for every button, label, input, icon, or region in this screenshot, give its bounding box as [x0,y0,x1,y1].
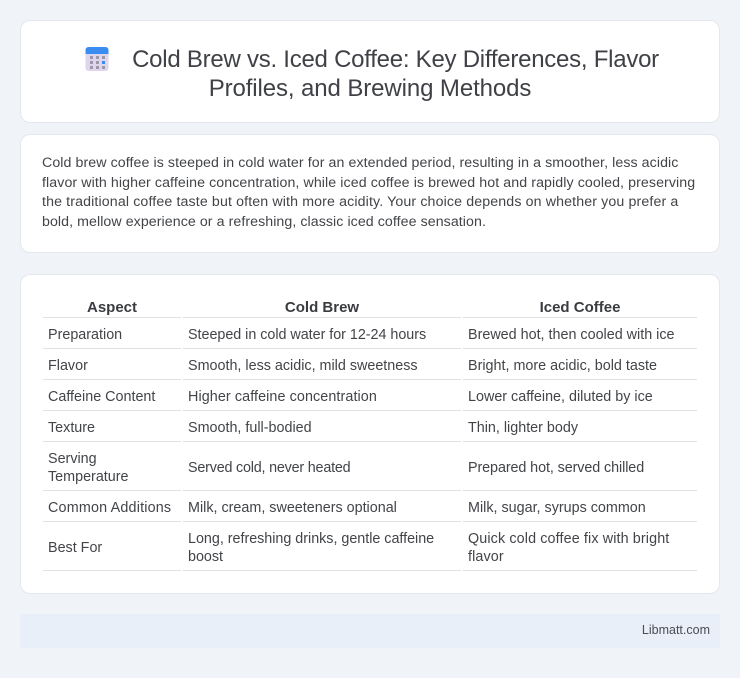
row: Caffeine Content: Lower caffeine, diluted by ice [468,389,653,405]
text block: introduction: Cold brew coffee is steeped in cold water for an extended period, resulting in a smoother, less acidic [42,155,678,171]
row: Flavor: Smooth, less acidic, mild sweetness [188,358,418,374]
footer credit: Libmatt.com [642,623,710,637]
row: Common Additions [43,500,697,522]
row: Common Additions: Milk, cream, sweeteners optional [188,500,397,516]
row: Best For [43,531,697,571]
row: Common Additions: Milk, sugar, syrups common [468,500,646,516]
row: Texture: Thin, lighter body [468,420,578,436]
row: Serving Temperature: Serving [48,451,97,467]
panel: title card [20,20,720,123]
row: Preparation [43,327,697,349]
row: Preparation: Steeped in cold water for 12-24 hours [188,327,426,343]
row: Best For: Best For [48,540,102,556]
row: Texture: Texture [48,420,95,436]
row: Texture: Smooth, full-bodied [188,420,312,436]
row: Best For: flavor [468,549,504,565]
row: Best For: Quick cold coffee fix with bright [468,531,669,547]
row: Best For: boost [188,549,223,565]
title: Profiles, and Brewing Methods [209,75,531,102]
text block: introduction: the traditional coffee taste but often with more acidity. Your choice depends on whether you prefer a [42,194,678,210]
text block: introduction: flavor with higher caffeine concentration, while iced coffee is brewed hot and rapidly cooled, preserving [42,174,695,190]
row: Flavor: Flavor [48,358,88,374]
header: Cold Brew: Cold Brew [285,299,359,316]
row: Common Additions: Common Additions [48,500,171,516]
table header row [43,299,697,318]
row: Caffeine Content [43,389,697,411]
row: Serving Temperature [43,451,697,491]
header: Iced Coffee: Iced Coffee [540,299,620,316]
panel: comparison table card [20,274,720,594]
row: Preparation: Brewed hot, then cooled with ice [468,327,675,343]
header: Aspect: Aspect [87,299,137,316]
row: Serving Temperature: Served cold, never heated [188,460,350,476]
title: Cold Brew vs. Iced Coffee: Key Differences, Flavor [132,46,659,73]
text block: introduction [42,155,695,230]
row: Best For: Long, refreshing drinks, gentle caffeine [188,531,434,547]
row: Caffeine Content: Caffeine Content [48,389,155,405]
row: Texture [43,420,697,442]
row: Flavor: Bright, more acidic, bold taste [468,358,657,374]
icon: calendar [86,47,108,71]
row: Preparation: Preparation [48,327,122,343]
title [132,46,659,102]
text block: introduction: bold, mellow experience or a refreshing, classic iced coffee sensation. [42,214,486,230]
footer bar [20,614,720,648]
row: Flavor [43,358,697,380]
row: Caffeine Content: Higher caffeine concentration [188,389,377,405]
row: Serving Temperature: Prepared hot, served chilled [468,460,644,476]
panel: intro text card [20,134,720,253]
row: Serving Temperature: Temperature [48,469,129,485]
